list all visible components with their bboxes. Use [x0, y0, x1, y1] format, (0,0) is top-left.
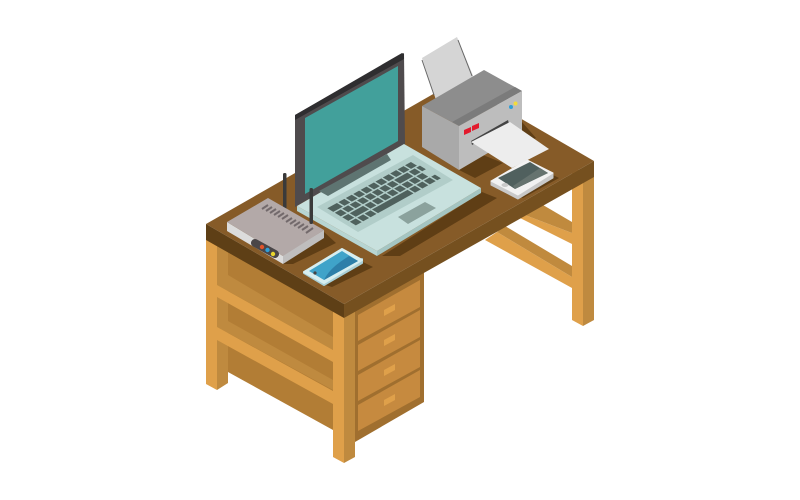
desk top [206, 81, 594, 318]
antenna front [310, 188, 313, 224]
laptop [295, 53, 497, 256]
right back leg [572, 165, 594, 326]
laptop screen [295, 53, 405, 207]
router vents [262, 205, 313, 233]
router [227, 173, 336, 264]
keyboard well [317, 155, 453, 232]
router shadow [283, 232, 336, 264]
printer shadow [459, 155, 503, 178]
output slot [471, 120, 509, 145]
hinge [319, 154, 391, 196]
output paper [471, 122, 549, 168]
drawer unit [355, 270, 424, 442]
indicator lights [464, 102, 518, 135]
drawer 4 [358, 370, 420, 431]
drawer 2 [358, 310, 420, 371]
paper tray [422, 37, 474, 100]
drawer 1 [358, 280, 420, 341]
desk back panel [228, 250, 333, 430]
keyboard keys [327, 161, 441, 225]
left front leg [206, 235, 228, 390]
router button plate [255, 243, 275, 256]
back right rails [485, 205, 572, 288]
touchpad [398, 202, 436, 224]
laptop shadow [382, 192, 497, 256]
laptop base [297, 144, 481, 256]
panel rails [217, 285, 333, 404]
antenna back [283, 173, 286, 209]
white phone [491, 160, 559, 199]
drawer 3 [358, 340, 420, 401]
router body [227, 222, 283, 264]
printer [422, 37, 536, 178]
blue phone [304, 249, 373, 287]
printer body [422, 70, 522, 126]
front corner leg [333, 310, 355, 463]
